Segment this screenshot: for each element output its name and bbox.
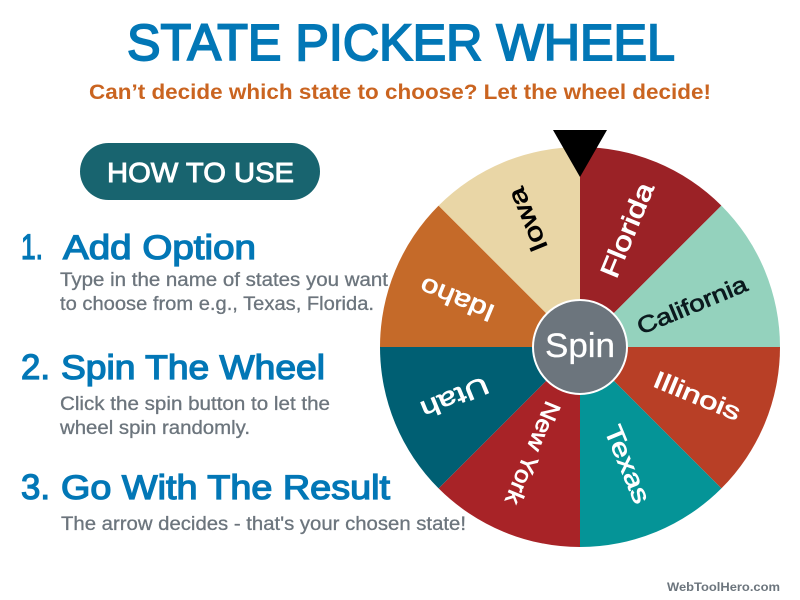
slice: Texas: Texas (598, 421, 656, 508)
step 1: Add Option (63, 229, 256, 267)
spin button (533, 300, 627, 394)
subtitle: Can’t decide which state to choose? Let the wheel decide! (89, 81, 711, 104)
step 1: Type in the name of states you want (60, 270, 389, 291)
slice: Iowa (439, 147, 580, 347)
slice: Illinois (580, 347, 780, 488)
step 1 (21, 228, 389, 315)
slice: Iowa: Iowa (502, 183, 554, 256)
slice: Texas (580, 347, 721, 547)
slice: Florida: Florida (594, 177, 660, 282)
step 3: Go With The Result (61, 469, 391, 507)
footer credit: WebToolHero.com (667, 580, 780, 594)
slice: New York (439, 347, 580, 547)
slice: Illinois: Illinois (649, 366, 744, 427)
title: STATE PICKER WHEEL (127, 14, 675, 71)
step 3: The arrow decides - that's your chosen state! (61, 514, 466, 535)
heading pill: how to use (80, 143, 320, 200)
slice: Idaho (380, 206, 580, 347)
step 2: wheel spin randomly. (59, 418, 250, 439)
step 2: Spin The Wheel (61, 349, 325, 387)
chart: picker wheel (380, 130, 780, 547)
step 2 (21, 348, 330, 439)
panel: how to use steps (21, 143, 466, 535)
slice: Utah: Utah (416, 371, 493, 424)
arrow: pointer (553, 130, 607, 177)
slice: Utah (380, 347, 580, 488)
slice: California (580, 206, 780, 347)
heading pill: how to use: HOW TO USE (107, 157, 294, 188)
step 1: 1. (21, 228, 43, 267)
step 1: to choose from e.g., Texas, Florida. (60, 294, 374, 315)
slice: Idaho: Idaho (416, 271, 499, 327)
step 3: 3. (21, 468, 50, 507)
slice: New York: New York (500, 398, 566, 509)
slice: Florida (580, 147, 721, 347)
step 2: 2. (21, 348, 50, 387)
step 3 (21, 468, 466, 535)
spin button: Spin (545, 327, 615, 365)
step 2: Click the spin button to let the (60, 394, 330, 415)
slice: California: California (633, 271, 751, 339)
